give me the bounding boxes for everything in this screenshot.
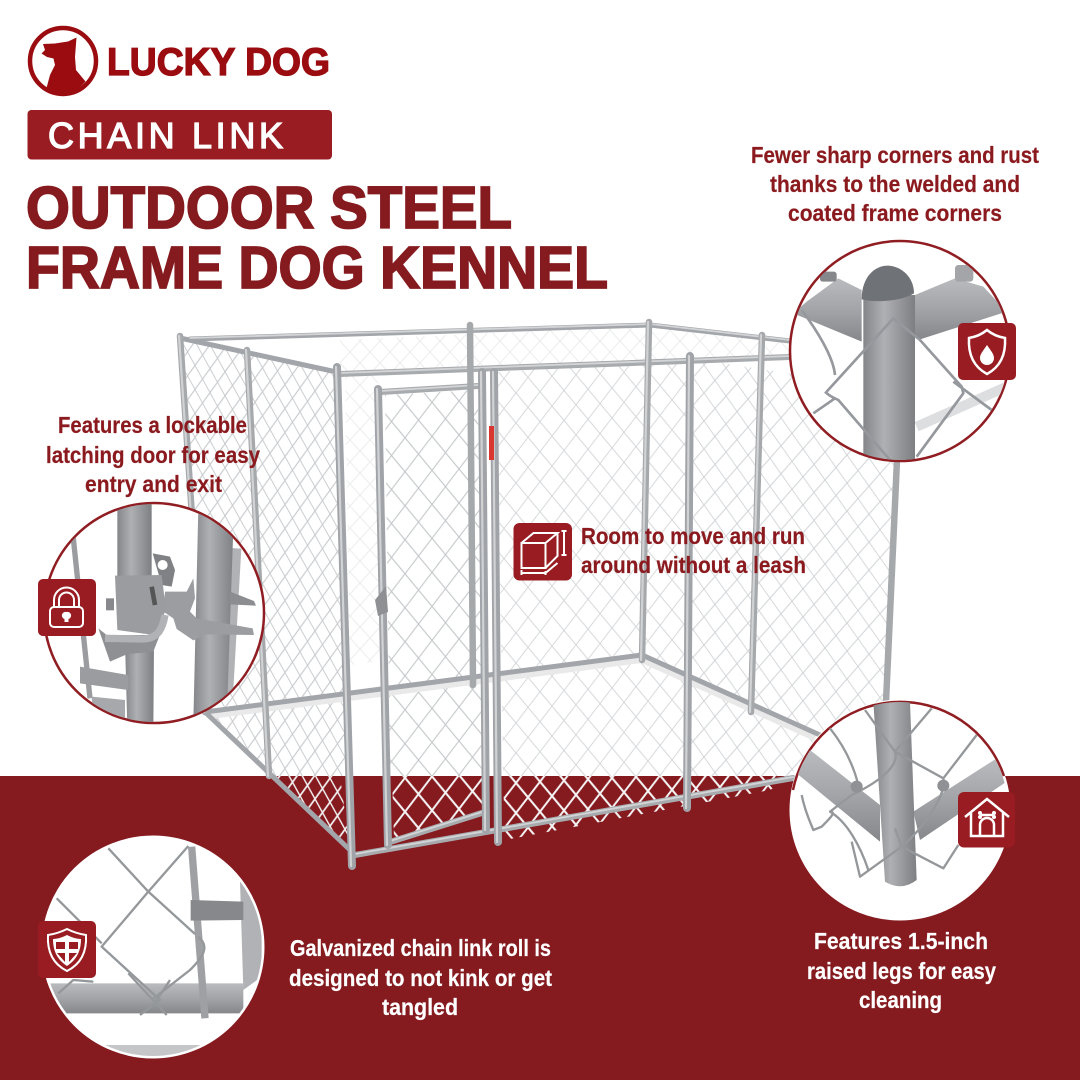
logo mark: dog in circle (30, 28, 96, 94)
floor shadow (210, 660, 815, 738)
kennel product illustration (179, 322, 897, 866)
title: OUTDOOR STEEL (26, 175, 512, 241)
steel frame rails and posts (179, 322, 897, 866)
detail circle: galvanized chain link (42, 836, 264, 1058)
callout: lockable door (46, 412, 260, 497)
brand logo (30, 28, 330, 94)
callout: galvanized roll: designed to not kink or get (289, 965, 552, 991)
callout text: around without a leash (581, 552, 806, 578)
product line banner (28, 110, 332, 160)
product line banner: CHAIN LINK (48, 115, 283, 156)
icon: padlock (38, 579, 96, 636)
callout: raised legs: cleaning (859, 987, 942, 1013)
callout: welded corners: Fewer sharp corners and rust (751, 142, 1039, 168)
callout: raised legs (807, 928, 996, 1013)
callout: lockable door: latching door for easy (46, 442, 260, 468)
callout: galvanized roll: Galvanized chain link roll is (290, 935, 551, 961)
title: FRAME DOG KENNEL (26, 235, 608, 301)
callout text (581, 523, 806, 578)
icon: shield with cross (38, 921, 96, 978)
callout: raised legs: raised legs for easy (807, 958, 996, 984)
chain link mesh panels (180, 326, 895, 850)
detail circle: raised legs (790, 700, 1010, 920)
callout: room to move (514, 523, 806, 580)
callout: welded corners: coated frame corners (788, 200, 1002, 226)
callout: lockable door: Features a lockable (58, 412, 247, 438)
callout: welded corners (751, 142, 1039, 226)
callout: galvanized roll (289, 935, 552, 1020)
door latch (375, 586, 388, 616)
callout: raised legs: Features 1.5-inch (814, 928, 988, 954)
title (26, 175, 608, 301)
detail circle: lockable latch (44, 502, 264, 728)
logo wordmark: LUCKY DOG (107, 41, 330, 84)
icon: dog house (958, 792, 1015, 848)
detail circle: welded corner (790, 241, 1010, 468)
callout text: Room to move and run (581, 523, 805, 549)
icon: shield with water drop (958, 323, 1016, 380)
red door tag (489, 426, 494, 460)
icon: cube dimensions (514, 523, 572, 580)
callout: galvanized roll: tangled (382, 994, 458, 1020)
callout: lockable door: entry and exit (85, 471, 222, 497)
callout: welded corners: thanks to the welded and (770, 171, 1020, 197)
